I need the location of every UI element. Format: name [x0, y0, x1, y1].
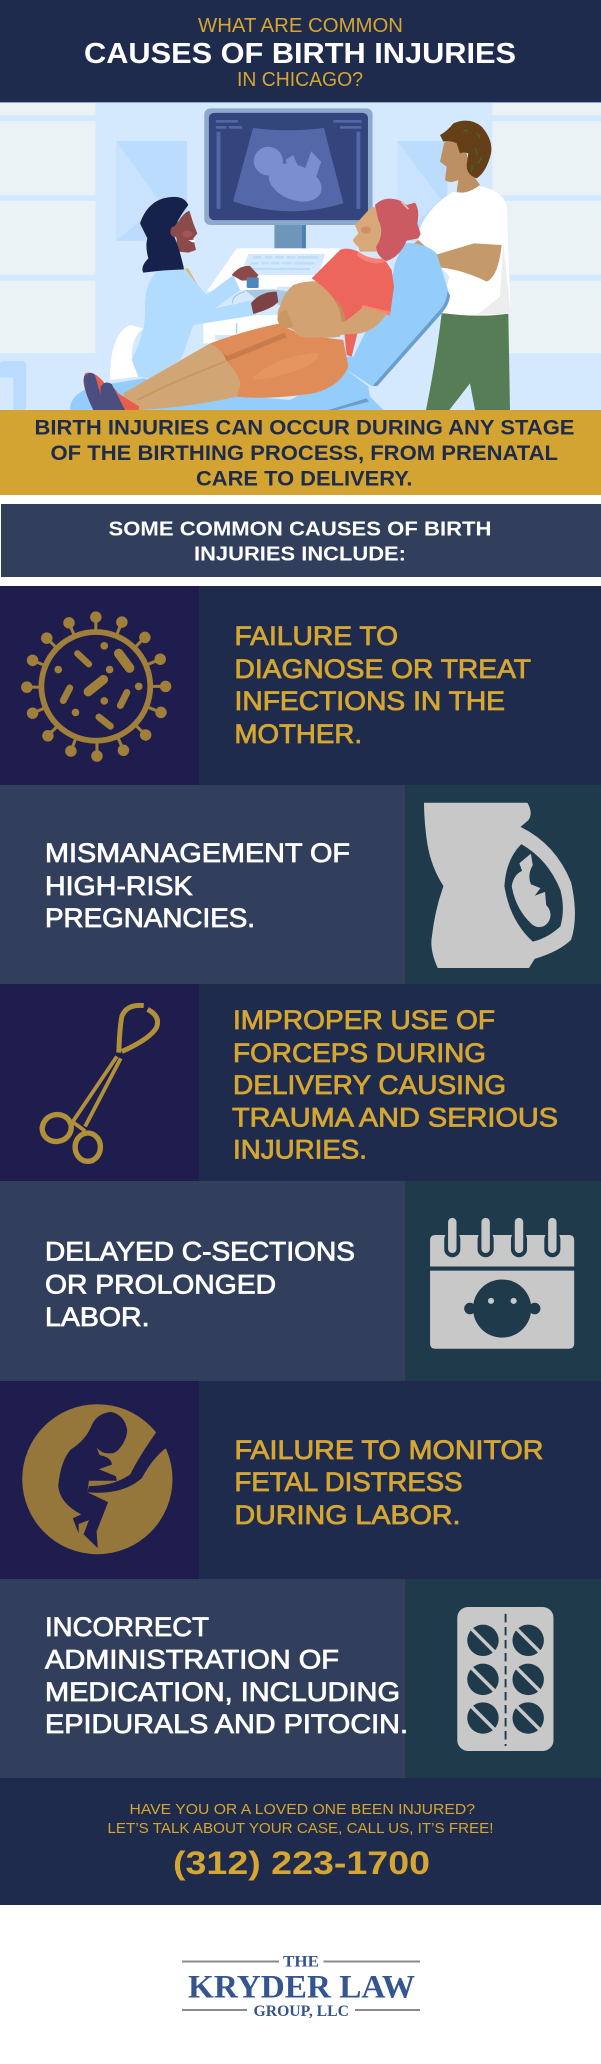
- illustration: ultrasound scene: [0, 102, 601, 410]
- doctor: [132, 197, 292, 378]
- panel: fetal distress: [0, 1381, 601, 1579]
- icon: pregnant belly: [424, 803, 575, 968]
- cause text: FAILURE TO: [234, 621, 398, 651]
- cause text: [45, 1612, 408, 1739]
- mother: [123, 199, 421, 410]
- cause text: IMPROPER USE OF: [233, 1005, 495, 1035]
- cause text: DELIVERY CAUSING: [233, 1070, 506, 1100]
- cause text: PREGNANCIES.: [45, 903, 255, 933]
- call to action footer: LET’S TALK ABOUT YOUR CASE, CALL US, IT’S FREE!: [108, 1820, 493, 1837]
- cause text: [234, 621, 531, 749]
- call to action footer: HAVE YOU OR A LOVED ONE BEEN INJURED?: [130, 1801, 475, 1818]
- logo: KRYDER LAW: [188, 1970, 415, 2006]
- cause text: MISMANAGEMENT OF: [45, 838, 350, 868]
- callout band: BIRTH INJURIES CAN OCCUR DURING ANY STAGE: [34, 416, 574, 440]
- title line 3: IN CHICAGO?: [237, 69, 363, 91]
- logo: THE: [283, 1954, 319, 1970]
- cause text: TRAUMA AND SERIOUS: [232, 1102, 558, 1132]
- phone number: (312) 223-1700: [173, 1845, 430, 1881]
- cause text: OR PROLONGED: [45, 1270, 276, 1300]
- panel: medication: [0, 1579, 601, 1778]
- call to action footer: [0, 1778, 601, 1905]
- cause text: [232, 1005, 558, 1164]
- icon: calendar with baby: [430, 1218, 574, 1349]
- cause text: [45, 838, 350, 933]
- cause text: DIAGNOSE OR TREAT: [234, 654, 531, 684]
- man: [403, 121, 511, 410]
- cause text: MEDICATION, INCLUDING: [45, 1677, 400, 1707]
- icon: virus: [21, 611, 171, 762]
- subheading panel: [1, 504, 601, 577]
- subheading panel: SOME COMMON CAUSES OF BIRTH: [108, 518, 491, 540]
- monitor: [204, 108, 373, 248]
- cause text: INCORRECT: [45, 1612, 209, 1642]
- cause text: [234, 1435, 544, 1530]
- shoes: [83, 373, 139, 410]
- chair: [70, 243, 450, 410]
- callout band: CARE TO DELIVERY.: [196, 466, 412, 490]
- cause text: HIGH-RISK: [45, 871, 193, 901]
- cause text: DELAYED C-SECTIONS: [45, 1236, 355, 1266]
- icon: fetus in circle: [22, 1404, 172, 1554]
- title line 2: CAUSES OF BIRTH INJURIES: [84, 38, 516, 70]
- icon: blister pack: [457, 1607, 553, 1751]
- logo: [182, 1954, 420, 2020]
- cause text: FETAL DISTRESS: [234, 1467, 462, 1497]
- cause text: INJURIES.: [233, 1134, 367, 1164]
- panel: infections: [0, 586, 601, 785]
- title line 1: WHAT ARE COMMON: [198, 15, 403, 37]
- callout band: [0, 410, 601, 495]
- panel: forceps: [0, 984, 601, 1181]
- cause text: FAILURE TO MONITOR: [234, 1435, 544, 1465]
- cause text: DURING LABOR.: [234, 1500, 460, 1530]
- cause text: [45, 1236, 355, 1332]
- cause text: MOTHER.: [234, 719, 362, 749]
- panel: high-risk pregnancies: [0, 785, 601, 984]
- cause text: INFECTIONS IN THE: [234, 686, 505, 716]
- icon: forceps: [39, 1005, 158, 1161]
- console: [207, 248, 340, 293]
- cause text: ADMINISTRATION OF: [45, 1644, 339, 1674]
- panel: delayed c-sections: [0, 1181, 601, 1381]
- cause text: FORCEPS DURING: [233, 1038, 486, 1068]
- header: [0, 0, 601, 103]
- callout band: OF THE BIRTHING PROCESS, FROM PRENATAL: [50, 441, 558, 465]
- cause text: LABOR.: [45, 1302, 150, 1332]
- subheading panel: INJURIES INCLUDE:: [194, 544, 406, 566]
- logo: GROUP, LLC: [254, 2003, 349, 2020]
- cause text: EPIDURALS AND PITOCIN.: [45, 1709, 408, 1739]
